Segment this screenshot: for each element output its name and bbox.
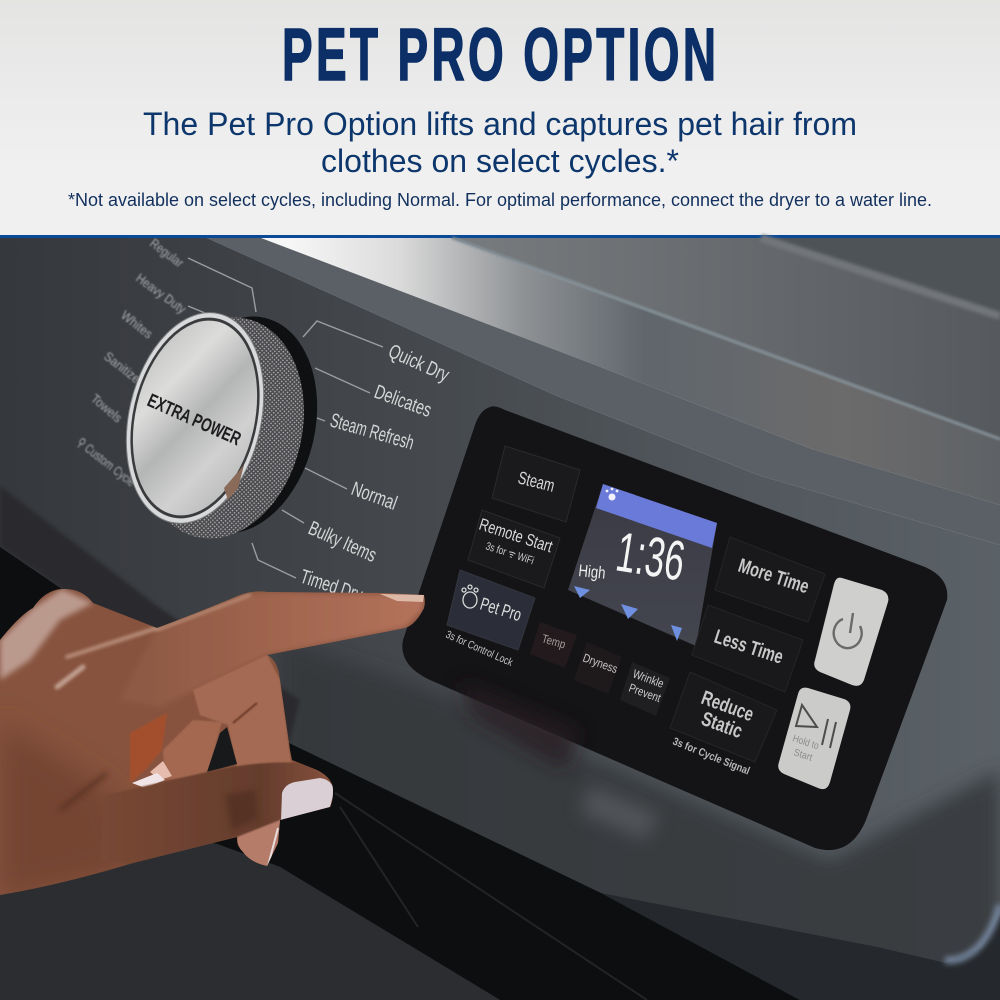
cycle labels: left, blurred: Heavy Duty: [133, 270, 189, 317]
cycle labels: left, blurred: Towels: [88, 391, 126, 426]
button: Remote Start: [468, 510, 560, 588]
icon: play pause: [796, 705, 836, 748]
subtitle: [143, 106, 857, 179]
Pet Pro label: Pet Pro: [478, 594, 524, 625]
thumb knuckle: [225, 790, 258, 830]
lower curled finger: [238, 819, 283, 866]
dial: [107, 299, 338, 555]
cycle connector lines: [188, 258, 383, 578]
cycle labels: right: Quick Dry: [385, 340, 452, 387]
left lower bevel: [0, 486, 300, 743]
face upper bevel: [207, 238, 1000, 545]
icon: power: [834, 613, 862, 648]
back of hand highlight: [0, 589, 93, 680]
door edge lines: [335, 793, 647, 1000]
chrome ring: [107, 299, 283, 537]
button: Less Time: [692, 605, 803, 692]
title: PET PRO OPTION: [282, 14, 716, 97]
Control Lock caption: 3s for Control Lock: [444, 629, 515, 669]
screen arrows: [574, 586, 682, 641]
thumb: [100, 762, 333, 865]
middle finger: [193, 655, 292, 770]
hand: [0, 580, 430, 900]
button: Less Time: Less Time: [711, 626, 786, 669]
button: Temp: [530, 622, 577, 668]
panel reflection: [460, 680, 580, 770]
black gap under panel: [0, 547, 800, 1000]
button: Temp: Temp: [540, 631, 567, 652]
icon: paw: [462, 585, 478, 608]
top surface: [450, 238, 1000, 439]
time: 1:36: [612, 520, 689, 592]
curled fingertip nail: [150, 761, 172, 780]
hand base: [0, 580, 430, 900]
cycle labels: left, blurred: ⚲ Custom Cycle: [74, 435, 139, 489]
upper right darker surface: [761, 238, 1000, 316]
button: Steam: [492, 446, 580, 522]
lower nail edge: [268, 828, 278, 866]
blue header bar: [596, 484, 717, 548]
lower right dark slate: [601, 893, 1000, 1000]
thumbnail: [281, 778, 334, 820]
start/pause button: Start: [792, 747, 814, 764]
button: Remote Start: Remote Start: [477, 515, 555, 556]
button: Reduce Static: Static: [698, 708, 745, 743]
knurled side: [119, 301, 325, 555]
silver strip: [261, 238, 1000, 505]
knuckle streaks: [57, 595, 250, 687]
icon: screen paw: [606, 488, 618, 500]
orange palm gap: [130, 713, 167, 783]
button: Remote Start: 3s for ᯤ WiFi: [484, 540, 535, 567]
cycle labels: left, blurred: Sanitize: [101, 349, 143, 386]
button: Dryness: Dryness: [581, 651, 620, 676]
button: Pet Pro: [447, 570, 535, 650]
button: More Time: [715, 537, 825, 622]
blue edge glint: [945, 905, 1000, 960]
lower left door surface: [0, 800, 500, 1000]
control panel face: [0, 238, 1000, 1000]
curled nail highlight: [132, 773, 165, 788]
button: Reduce Static: [670, 672, 777, 762]
cycle labels: right: Delicates: [371, 381, 434, 422]
display screen: [568, 484, 717, 646]
cycle labels: right: Bulky Items: [305, 517, 380, 567]
index finger: [152, 592, 425, 702]
chrome reflection: [224, 465, 244, 500]
photo: dryer control panel: [0, 235, 1000, 1000]
High label: High: [578, 561, 606, 583]
Cycle Signal caption: 3s for Cycle Signal: [671, 736, 751, 777]
Hold to Start: Hold to: [791, 733, 821, 752]
cycle labels: left, blurred: Regular: [147, 235, 187, 271]
ridge highlight: [452, 238, 1000, 439]
start/pause button: [778, 688, 850, 789]
cycle labels: right: Normal: [348, 478, 400, 515]
cycle labels: right: Steam Refresh: [328, 410, 416, 455]
header rule: [0, 235, 1000, 238]
subtitle: The Pet Pro Option lifts and captures pet hair from: [143, 106, 857, 142]
button: More Time: More Time: [735, 555, 812, 598]
button: Dryness: [574, 642, 622, 694]
control panel: [402, 406, 947, 850]
power button: [814, 578, 888, 686]
button: Wrinkle Prevent: Wrinkle: [631, 667, 666, 691]
button: Wrinkle Prevent: Prevent: [627, 681, 663, 705]
dial face: [115, 308, 275, 528]
lower palm shading: [0, 732, 124, 893]
index fingernail: [380, 594, 424, 602]
header background: [0, 0, 1000, 235]
button: Wrinkle Prevent: [620, 662, 670, 716]
button: Reduce Static: Reduce: [698, 687, 757, 726]
subtitle: clothes on select cycles.*: [321, 143, 679, 179]
upper right light strip: [761, 238, 1000, 316]
cycle labels: left, blurred: Whites: [118, 308, 156, 342]
inner dark ring: [112, 305, 278, 531]
curled finger: [163, 720, 222, 780]
bevel highlight: [580, 785, 660, 840]
EXTRA POWER text: EXTRA POWER: [144, 390, 244, 450]
dial shadow ring: [142, 301, 338, 549]
button: Steam: Steam: [516, 467, 557, 496]
footnote: *Not available on select cycles, including Normal. For optimal performance, connect the dryer to a water line.: [68, 190, 932, 210]
palm crease: [60, 773, 107, 810]
cycle labels: right: Timed Dry: [297, 566, 365, 607]
face lower shade: [280, 640, 1000, 1000]
middle finger crease: [233, 703, 257, 723]
cycle labels: left, blurred: [74, 235, 189, 489]
cycle labels: right: [297, 340, 452, 607]
gap between fingers: [207, 727, 237, 772]
